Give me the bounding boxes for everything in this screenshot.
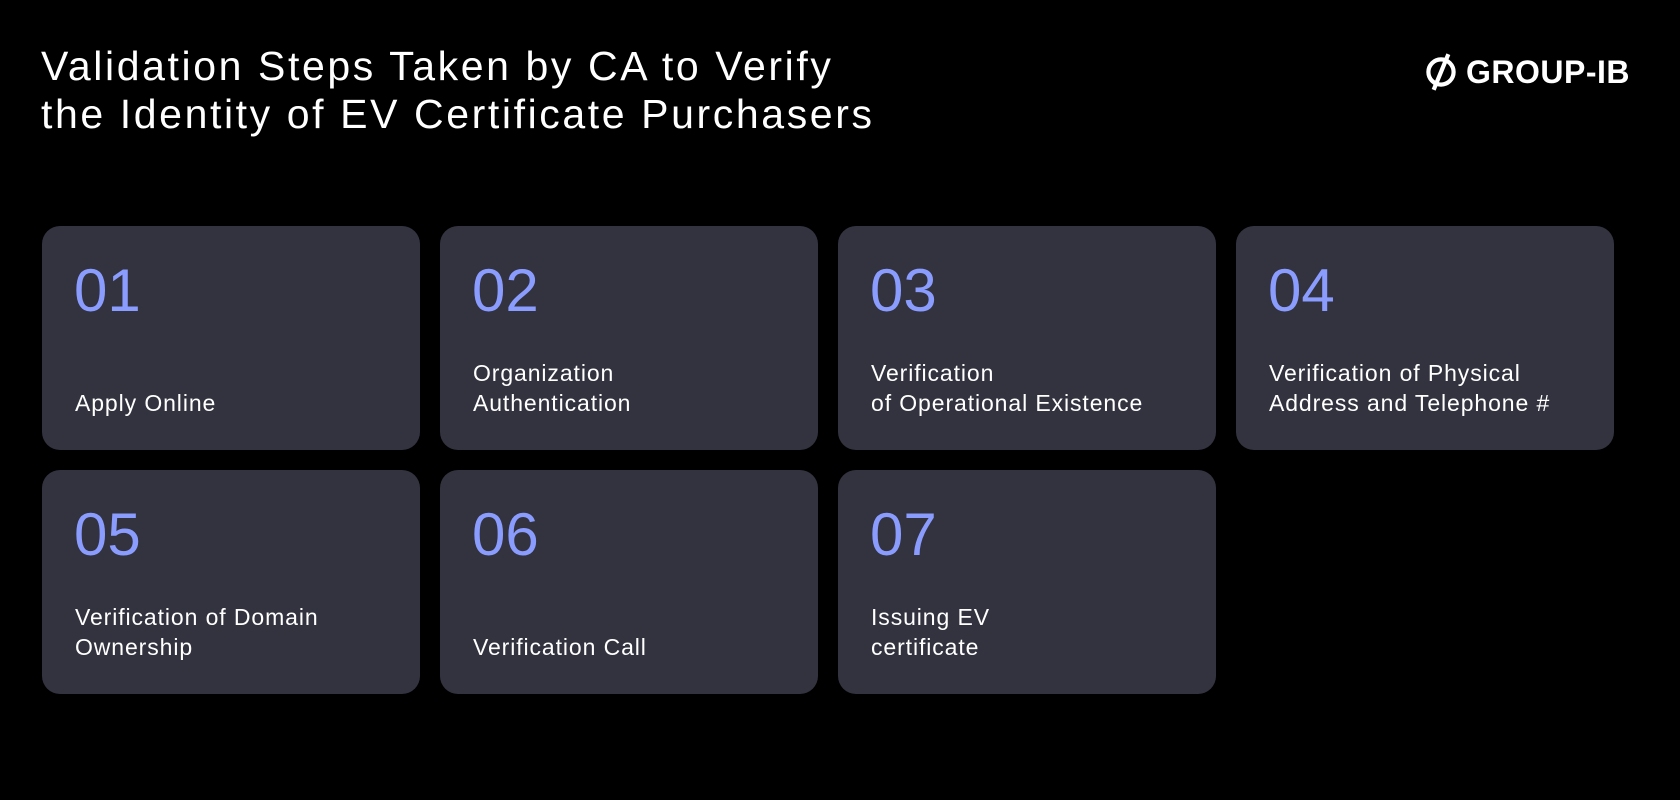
card 07: Issuing EV — [871, 604, 990, 630]
card 06: Verification Call — [473, 634, 647, 660]
card 06: 06 — [472, 501, 539, 568]
card 02: Organization — [473, 360, 614, 386]
title: Validation Steps Taken by CA to Verify — [41, 43, 833, 89]
card 05: Verification of Domain — [75, 604, 319, 630]
card 07: certificate — [871, 634, 979, 660]
title — [41, 43, 875, 137]
card 04 — [1236, 226, 1614, 450]
logo: GROUP-IB — [1466, 54, 1630, 90]
title: the Identity of EV Certificate Purchasers — [41, 91, 875, 137]
card 07: 07 — [870, 501, 937, 568]
card 01 — [42, 226, 420, 450]
card 04: Address and Telephone # — [1269, 390, 1550, 416]
card 01: Apply Online — [75, 390, 216, 416]
card 07 — [838, 470, 1216, 694]
card 06 — [440, 470, 818, 694]
card 05: 05 — [74, 501, 141, 568]
card 03: 03 — [870, 257, 937, 324]
card 02 — [440, 226, 818, 450]
card 05: Ownership — [75, 634, 193, 660]
card 03 — [838, 226, 1216, 450]
card 01: 01 — [74, 257, 141, 324]
card 03: of Operational Existence — [871, 390, 1143, 416]
card 02: Authentication — [473, 390, 631, 416]
card 04: Verification of Physical — [1269, 360, 1521, 386]
card 04: 04 — [1268, 257, 1335, 324]
card 05 — [42, 470, 420, 694]
card 03: Verification — [871, 360, 994, 386]
card 02: 02 — [472, 257, 539, 324]
